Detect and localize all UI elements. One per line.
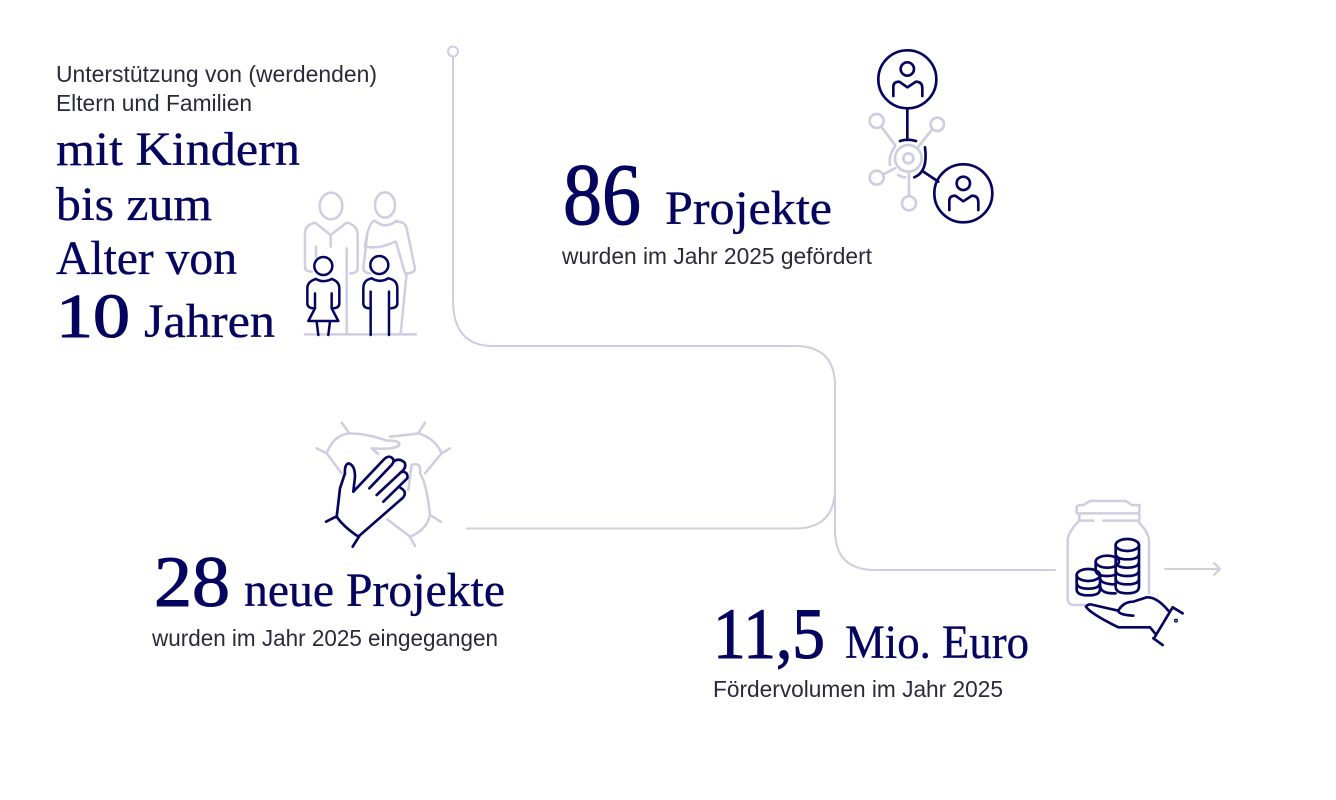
icon: family (305, 192, 416, 335)
heading: age range: Alter von (56, 232, 237, 285)
heading: age range: bis zum (56, 178, 212, 231)
intro text: Eltern und Familien (56, 90, 252, 116)
text block: funding volume (713, 594, 1029, 702)
connector lines (448, 46, 1055, 570)
heading: age range: mit Kindern (56, 123, 300, 176)
number: 28: 28 (154, 542, 230, 622)
caption: wurden im Jahr 2025 gefördert (561, 243, 873, 269)
intro text (56, 61, 377, 116)
arrow (1165, 563, 1220, 575)
caption: wurden im Jahr 2025 eingegangen (151, 625, 498, 651)
intro text: Unterstützung von (werdenden) (56, 61, 377, 87)
text block: target group (56, 61, 377, 351)
icon: network (870, 50, 992, 222)
label: Projekte: Projekte (665, 182, 832, 235)
heading: age range: Jahren (144, 295, 275, 348)
number: 11,5: 11,5 (713, 594, 825, 674)
caption: Fördervolumen im Jahr 2025 (713, 676, 1003, 702)
icon: coin jar (1068, 501, 1183, 645)
heading: age range: 10 (56, 283, 130, 351)
number: 86: 86 (563, 147, 641, 244)
heading: age range (56, 123, 300, 351)
text block: new projects (151, 542, 505, 651)
label: Mio. Euro: Mio. Euro (845, 616, 1029, 669)
text block: projects funded (561, 147, 873, 269)
icon: hands (317, 423, 450, 547)
label: neue Projekte: neue Projekte (244, 564, 505, 617)
